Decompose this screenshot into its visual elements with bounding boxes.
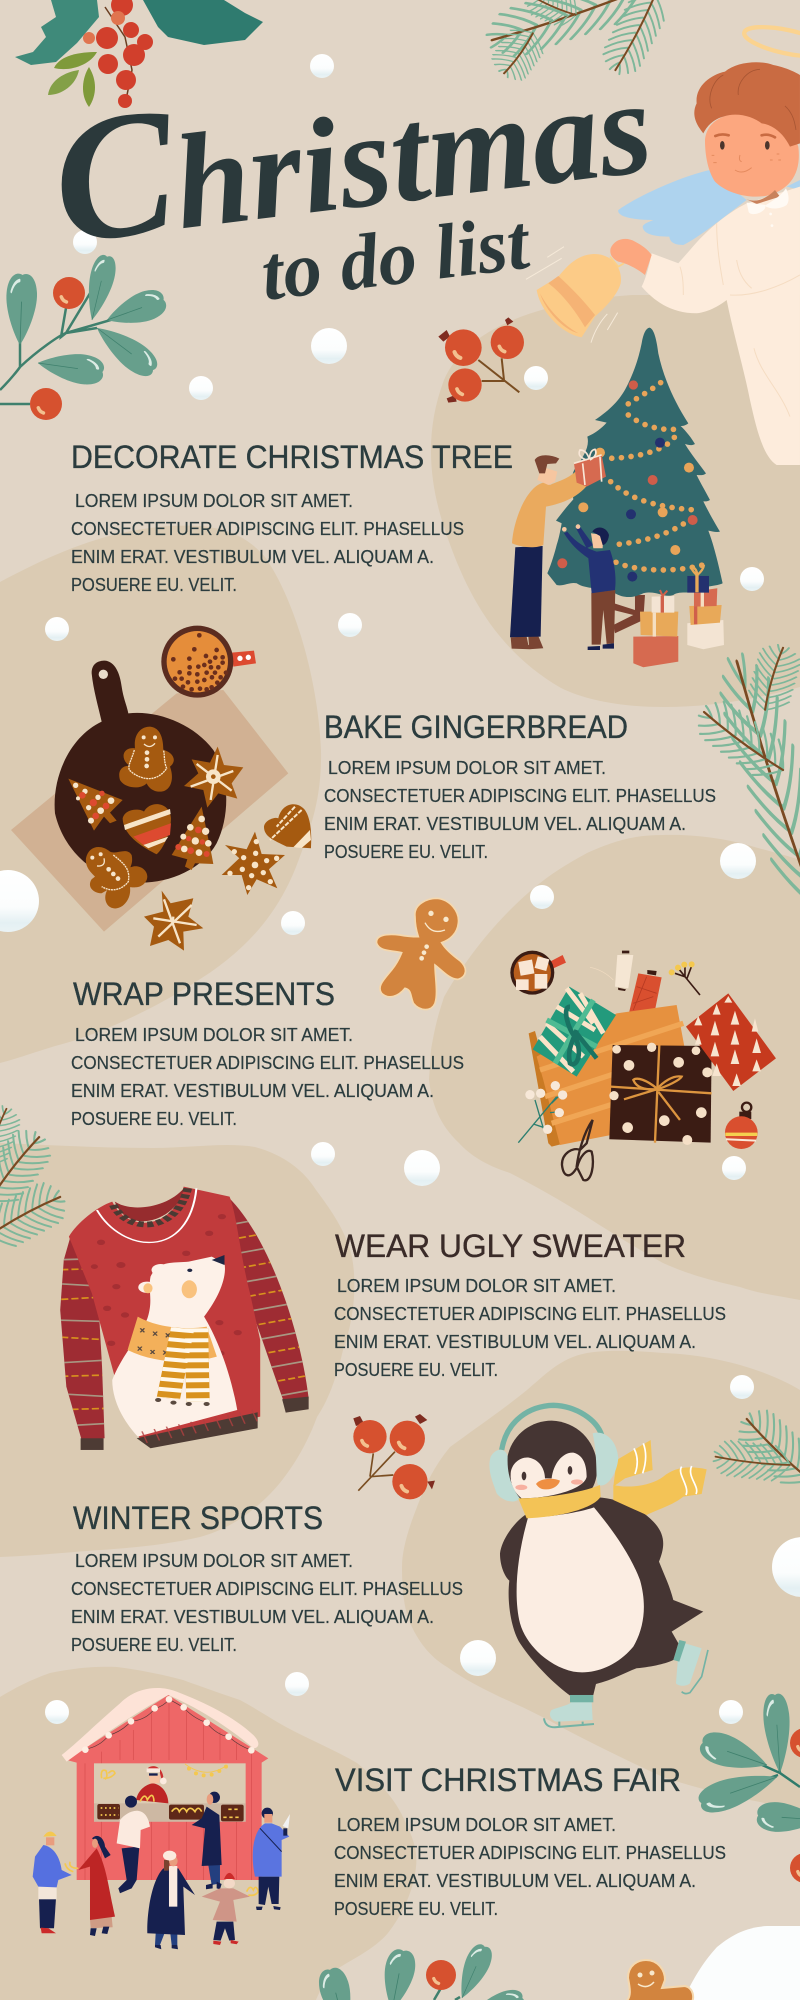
hand	[610, 239, 652, 275]
collar	[747, 188, 789, 214]
bell	[537, 254, 621, 337]
body	[71, 491, 464, 595]
hem and cuffs	[137, 1412, 258, 1448]
dark dotted gift	[609, 1043, 712, 1145]
body: LOREM IPSUM DOLOR SIT AMET.	[75, 1551, 353, 1571]
sleeves	[60, 1233, 105, 1440]
gingerbread man	[377, 898, 465, 1010]
cookie snowflake bottom	[144, 891, 203, 951]
halo	[742, 21, 800, 62]
icon: pomegranate sprig middle	[353, 1414, 435, 1499]
green gift	[533, 987, 616, 1077]
body: POSUERE EU. VELIT.	[324, 842, 488, 862]
far skate	[673, 1640, 708, 1694]
body	[334, 1276, 726, 1380]
text block: decorate tree	[71, 439, 513, 595]
tree	[547, 328, 723, 597]
body	[324, 758, 716, 862]
text block: bake gingerbread	[324, 709, 716, 862]
presents stack	[633, 565, 724, 667]
icon: leaf sprig bottom right	[695, 1693, 800, 1883]
heading: BAKE GINGERBREAD	[324, 709, 628, 745]
icon: pomegranate sprig top	[438, 317, 524, 403]
body: POSUERE EU. VELIT.	[71, 1109, 237, 1129]
neck	[115, 1188, 184, 1221]
icon: holly top left	[15, 0, 263, 108]
body: ENIM ERAT. VESTIBULUM VEL. ALIQUAM A.	[334, 1871, 696, 1891]
head	[705, 113, 799, 197]
customer blue left	[33, 1831, 78, 1933]
robe	[642, 187, 800, 465]
body: POSUERE EU. VELIT.	[71, 1635, 237, 1655]
body: CONSECTETUER ADIPISCING ELIT. PHASELLUS	[71, 519, 464, 539]
bear	[112, 1257, 237, 1437]
boy	[562, 524, 616, 650]
body: CONSECTETUER ADIPISCING ELIT. PHASELLUS	[71, 1579, 463, 1599]
title: Christmas	[43, 11, 660, 282]
text block: wrap presents	[71, 976, 464, 1129]
text block: ugly sweater	[334, 1228, 726, 1380]
body: ENIM ERAT. VESTIBULUM VEL. ALIQUAM A.	[71, 1607, 434, 1627]
snow mound bottom right	[683, 1926, 800, 2000]
scarf tails	[613, 1440, 707, 1515]
earmuffs	[502, 1405, 602, 1450]
body: ENIM ERAT. VESTIBULUM VEL. ALIQUAM A.	[71, 1081, 434, 1101]
body: CONSECTETUER ADIPISCING ELIT. PHASELLUS	[324, 786, 716, 806]
heading: WEAR UGLY SWEATER	[335, 1228, 686, 1264]
body	[71, 1551, 463, 1655]
white berry twig	[518, 1081, 567, 1143]
illustration: wrapping presents	[377, 898, 776, 1180]
baubles	[557, 380, 698, 582]
pretzels and garland	[101, 1764, 227, 1779]
belly	[517, 1507, 644, 1672]
head	[507, 1421, 597, 1500]
heading: WRAP PRESENTS	[73, 976, 335, 1012]
icon: pine branch left	[0, 1101, 72, 1254]
wing	[618, 170, 747, 245]
body: POSUERE EU. VELIT.	[71, 575, 237, 595]
man	[510, 455, 598, 649]
icon: leaf sprig bottom	[315, 1941, 527, 2000]
stall house	[62, 1688, 268, 1880]
body: ENIM ERAT. VESTIBULUM VEL. ALIQUAM A.	[334, 1332, 696, 1352]
customer navy center	[147, 1851, 195, 1949]
text block: christmas fair	[334, 1762, 726, 1919]
body: ENIM ERAT. VESTIBULUM VEL. ALIQUAM A.	[324, 814, 686, 834]
cookie heart	[264, 804, 311, 848]
orange wrapping paper	[529, 1031, 565, 1147]
body: LOREM IPSUM DOLOR SIT AMET.	[328, 758, 606, 778]
body	[334, 1815, 726, 1919]
cocoa mug	[510, 951, 566, 995]
icon: leaf sprig left	[0, 253, 169, 420]
garlands	[607, 383, 710, 570]
icon: pine branch right	[689, 641, 800, 913]
customer child	[202, 1873, 258, 1945]
subtitle: to do list	[256, 198, 535, 317]
heading: DECORATE CHRISTMAS TREE	[71, 439, 513, 475]
berry twig	[669, 961, 700, 995]
heading: WINTER SPORTS	[73, 1500, 323, 1536]
mug	[161, 626, 256, 698]
cookie gingerman bottom	[86, 847, 147, 908]
held gift	[574, 449, 606, 487]
body: LOREM IPSUM DOLOR SIT AMET.	[75, 1025, 353, 1045]
seller	[136, 1766, 168, 1803]
board	[55, 661, 226, 883]
illustration: gingerbread board	[11, 626, 311, 951]
customer white sweater	[117, 1796, 150, 1893]
text block: winter sports	[71, 1500, 463, 1655]
trays	[97, 1804, 244, 1821]
icon: gingerbread bottom	[625, 1960, 693, 2000]
cookie dotted star	[222, 832, 285, 895]
illustration: ugly sweater	[51, 1187, 311, 1450]
body: CONSECTETUER ADIPISCING ELIT. PHASELLUS	[334, 1843, 726, 1863]
body: POSUERE EU. VELIT.	[334, 1899, 498, 1919]
cloth	[11, 690, 288, 932]
body: CONSECTETUER ADIPISCING ELIT. PHASELLUS	[71, 1053, 464, 1073]
illustration: skating penguin	[489, 1405, 708, 1727]
scissors	[562, 1120, 593, 1180]
illustration: christmas fair stall	[33, 1688, 290, 1949]
body: POSUERE EU. VELIT.	[334, 1360, 498, 1380]
customer red coat	[78, 1836, 115, 1936]
body: CONSECTETUER ADIPISCING ELIT. PHASELLUS	[334, 1304, 726, 1324]
face details	[720, 141, 725, 150]
scarf wrap	[518, 1485, 601, 1518]
customer navy coat	[192, 1792, 222, 1889]
heading: VISIT CHRISTMAS FAIR	[335, 1762, 681, 1798]
body	[71, 1025, 464, 1129]
cookie star snowflake	[184, 747, 243, 808]
body: ENIM ERAT. VESTIBULUM VEL. ALIQUAM A.	[71, 547, 434, 567]
body	[500, 1497, 703, 1696]
red tree-pattern gift	[686, 993, 776, 1091]
body: LOREM IPSUM DOLOR SIT AMET.	[75, 491, 353, 511]
body: LOREM IPSUM DOLOR SIT AMET.	[337, 1276, 616, 1296]
ornament	[725, 1103, 758, 1149]
scarf	[128, 1317, 217, 1362]
illustration: decorating tree	[510, 328, 724, 667]
thread spools	[590, 951, 681, 1038]
icon: pine branch right lower	[712, 1402, 800, 1496]
body: LOREM IPSUM DOLOR SIT AMET.	[337, 1815, 616, 1835]
illustration: angel with bell	[526, 21, 800, 465]
cookies	[68, 727, 311, 951]
icon: pine branch top	[482, 0, 673, 86]
hair	[694, 62, 800, 147]
customer blue right	[253, 1808, 290, 1910]
tree trunk and stand	[613, 595, 645, 633]
near skate	[544, 1695, 594, 1727]
body	[69, 1187, 260, 1440]
